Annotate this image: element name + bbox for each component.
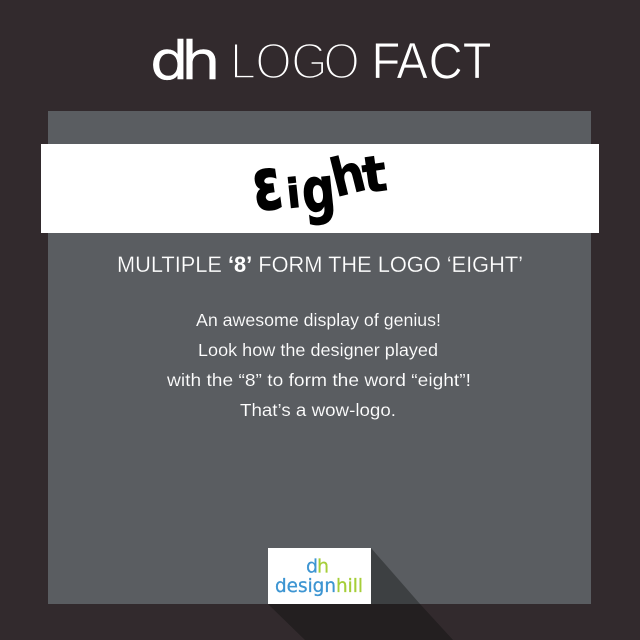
eight logo [247,141,390,228]
long shadow on background [268,604,453,640]
letter g: g [298,152,339,228]
logo wordmark: designhill [275,575,363,597]
letter t: t [359,144,390,205]
letter i: i [284,171,303,218]
body text [166,310,471,420]
brand letter h: h [181,30,221,92]
logo mark: h [317,556,329,578]
heading: MULTIPLE ‘8’ FORM THE LOGO ‘EIGHT’ [117,252,523,277]
white logo band [41,144,599,233]
body line 2: Look how the designer played [198,340,438,360]
title word: logo: LOGO [230,34,360,90]
brand letter d: d [150,31,189,92]
body line 4: That’s a wow-logo. [240,400,396,420]
long shadow on panel [268,548,420,604]
designhill logo [268,548,371,604]
logo mark: d [306,556,318,578]
letter e: ɛ [247,141,287,228]
title word: fact: FACT [372,34,491,90]
title [150,30,491,92]
logo card [268,548,371,604]
letter h: h [324,142,371,209]
body line 3: with the “8” to form the word “eight”! [166,370,471,390]
body line 1: An awesome display of genius! [196,310,441,330]
title brand mark [150,30,221,92]
panel: main card [48,111,591,604]
